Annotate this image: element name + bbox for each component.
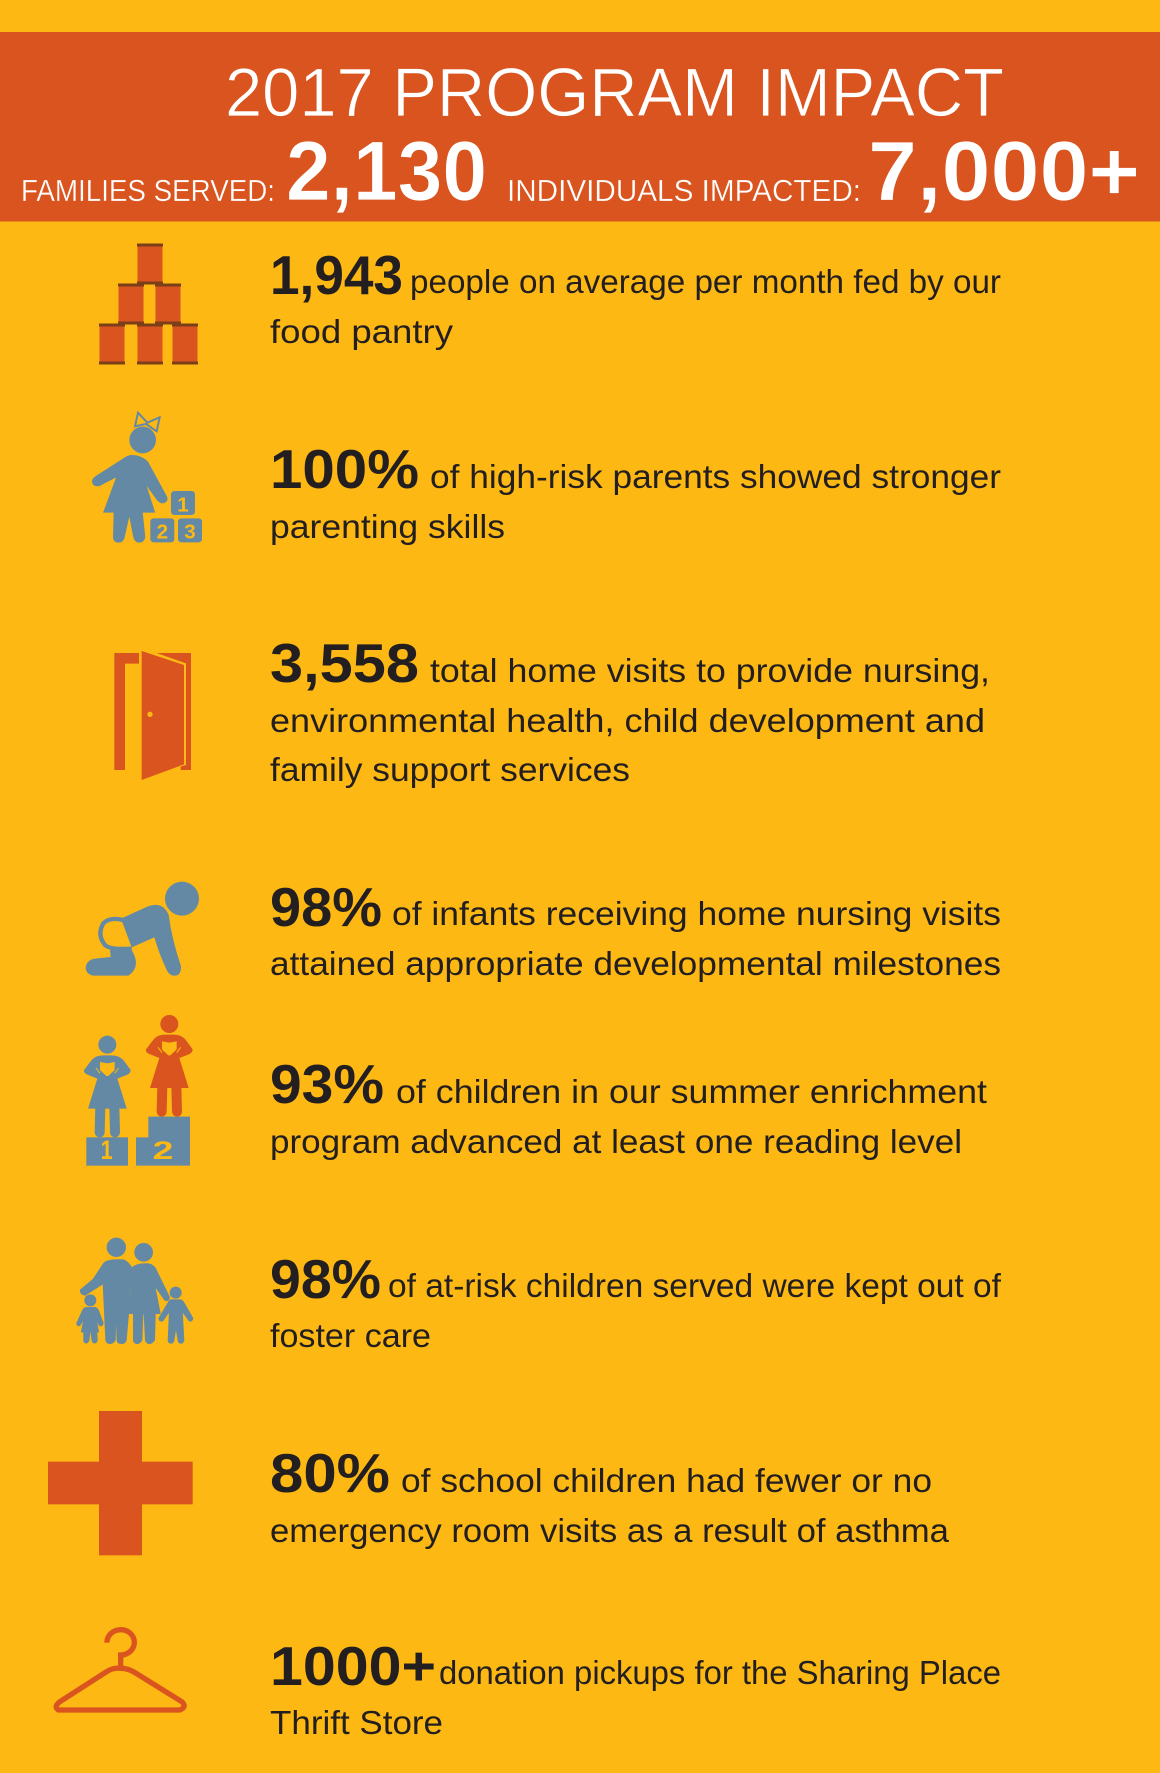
icon: clothes hanger (56, 1630, 184, 1710)
families served label: FAMILIES SERVED: (21, 173, 275, 208)
header banner (0, 32, 1160, 222)
description line: of children in our summer enrichment (396, 1073, 987, 1110)
row 2 text (270, 438, 1001, 545)
row 5 text (270, 1053, 987, 1160)
description line: Thrift Store (270, 1704, 443, 1741)
description line: of high-risk parents showed stronger (430, 458, 1001, 495)
stat: 1000+: 1000+ (270, 1635, 436, 1697)
stat: 98%: 98% (270, 1248, 381, 1310)
icon: medical cross (48, 1411, 193, 1555)
description line: parenting skills (270, 508, 505, 545)
title: 2017 PROGRAM IMPACT (225, 54, 1004, 131)
orange reader (146, 1015, 193, 1112)
stat: 80%: 80% (270, 1442, 390, 1504)
individuals impacted number: 7,000+ (868, 124, 1140, 218)
stat: 93%: 93% (270, 1053, 384, 1115)
row 6 text (270, 1248, 1002, 1354)
row 8 text (270, 1635, 1001, 1741)
icon: girl with blocks: 1 (177, 493, 189, 516)
icon: girl with blocks (93, 413, 202, 543)
description line: emergency room visits as a result of asthma (270, 1512, 950, 1549)
description line: of infants receiving home nursing visits (392, 895, 1001, 932)
icon: girl with blocks: 3 (184, 520, 196, 543)
stat: 1,943: 1,943 (270, 244, 403, 306)
icon: girl with blocks: 2 (157, 520, 168, 543)
stat: 98%: 98% (270, 876, 382, 938)
description line: environmental health, child development and (270, 702, 985, 739)
icon: open door (114, 651, 191, 780)
row 3 text (270, 632, 990, 788)
stat: 3,558: 3,558 (270, 632, 419, 694)
icon: crawling baby (86, 882, 199, 976)
description line: of at-risk children served were kept out of (388, 1267, 1002, 1304)
individuals impacted label: INDIVIDUALS IMPACTED: (507, 173, 861, 208)
description line: foster care (270, 1317, 431, 1354)
description line: food pantry (270, 313, 454, 350)
description line: total home visits to provide nursing, (430, 652, 990, 689)
row 1 text (270, 244, 1001, 350)
icon: stacked cans (99, 244, 198, 363)
row 4 text (270, 876, 1001, 982)
blue reader (84, 1036, 131, 1132)
description line: family support services (270, 751, 630, 788)
stat: 100%: 100% (270, 438, 419, 500)
icon: readers on podium (84, 1015, 193, 1166)
podium (86, 1117, 190, 1166)
description line: attained appropriate developmental milestones (270, 945, 1001, 982)
icon: family (77, 1238, 193, 1343)
families served number: 2,130 (286, 124, 487, 218)
description line: donation pickups for the Sharing Place (439, 1654, 1001, 1691)
description line: of school children had fewer or no (401, 1462, 932, 1499)
podium: 1 (101, 1135, 113, 1165)
description line: program advanced at least one reading level (270, 1123, 962, 1160)
description line: people on average per month fed by our (410, 263, 1001, 300)
row 7 text (270, 1442, 950, 1549)
podium: 2 (153, 1138, 173, 1165)
